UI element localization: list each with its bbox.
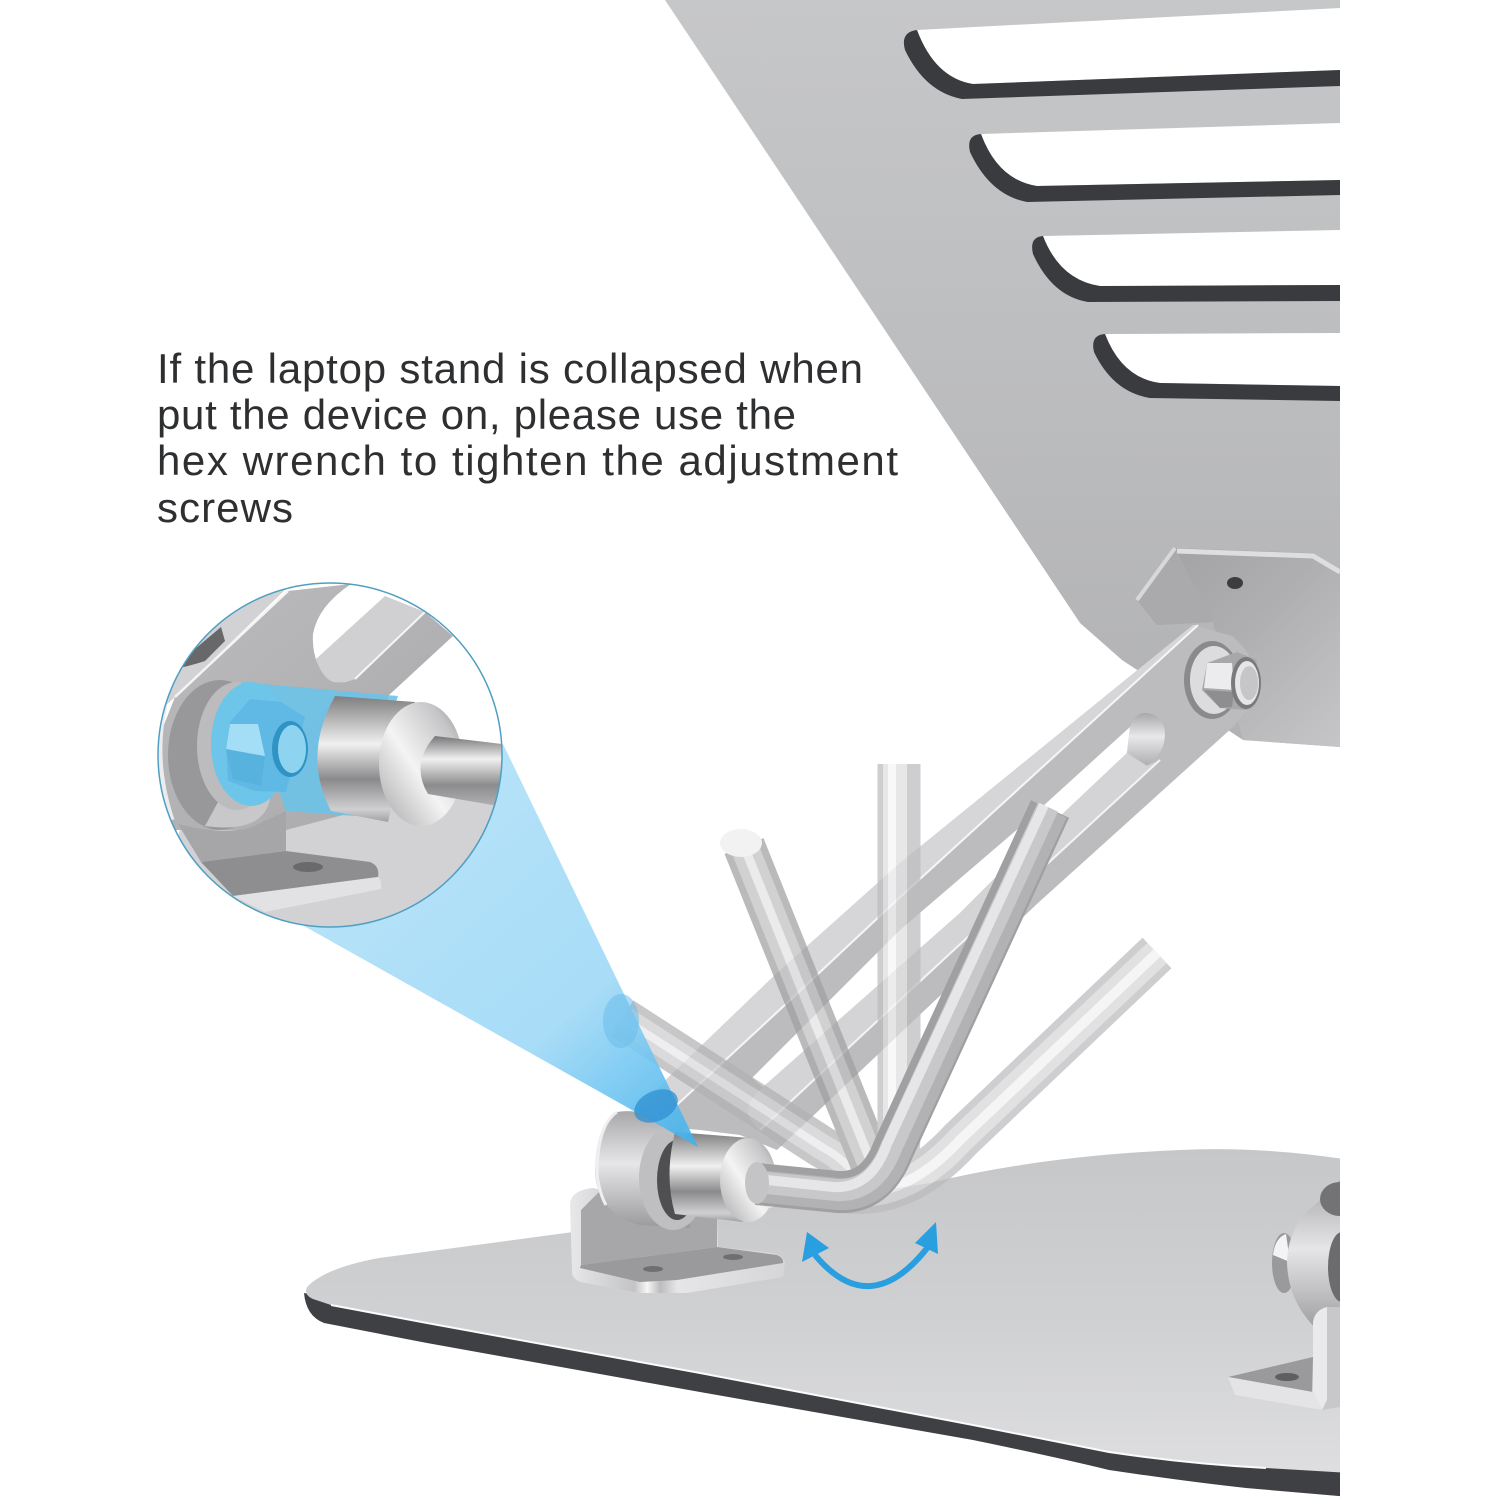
arm slot bbox=[752, 727, 1130, 1087]
lens: dark vent corner bbox=[183, 627, 225, 668]
lens: bracket vertical plate bbox=[178, 811, 286, 862]
wrench stem end bbox=[745, 1162, 769, 1204]
arm body bbox=[640, 625, 1257, 1150]
arm top strip bbox=[640, 625, 1198, 1127]
vent slot 3 bbox=[1032, 230, 1340, 302]
instruction text bbox=[157, 345, 898, 531]
support arm with long slot bbox=[640, 625, 1257, 1150]
lens: rail inside slot bbox=[316, 596, 425, 682]
lens: bracket disc bbox=[168, 680, 234, 830]
base plate bbox=[304, 1149, 1350, 1497]
ghost wrench: upper left bbox=[720, 829, 873, 1192]
top plate of the stand with vent slots bbox=[665, 0, 1340, 747]
right-hand bracket on base bbox=[1228, 1180, 1340, 1410]
instruction text: screws bbox=[157, 484, 293, 531]
instruction text: If the laptop stand is collapsed when bbox=[157, 345, 863, 392]
wrench socket bbox=[670, 1132, 776, 1222]
lens: upper left background bbox=[166, 590, 285, 705]
instruction text: put the device on, please use the bbox=[157, 391, 796, 438]
rotation arrow bbox=[802, 1222, 938, 1286]
left hinge bracket bbox=[570, 1188, 785, 1293]
ghost wrench positions bbox=[622, 764, 1157, 1193]
ghost wrench: left bbox=[622, 1018, 862, 1190]
lens: highlighted nut bbox=[211, 682, 398, 816]
lens: foot plate bbox=[201, 851, 378, 896]
lens: wrench stem bbox=[420, 736, 502, 806]
top bolt and nut bbox=[1184, 641, 1261, 719]
wrench long arm bbox=[757, 805, 1052, 1194]
magnified detail circle bbox=[150, 580, 510, 930]
lens: stand arm bbox=[150, 584, 453, 830]
lens: lower plate background bbox=[178, 798, 494, 926]
lens: arm slot bbox=[313, 584, 425, 682]
magnifier beam bbox=[304, 744, 698, 1147]
arm lower rail strip bbox=[765, 753, 1156, 1101]
vent slot 4 bbox=[1093, 333, 1340, 401]
vent slot 2 bbox=[969, 123, 1340, 202]
rear bracket on top plate bbox=[1137, 548, 1340, 747]
hinge disc bbox=[595, 1111, 696, 1230]
lens: socket bbox=[317, 696, 463, 826]
ghost wrench: right bbox=[845, 953, 1157, 1193]
vent slot 1 bbox=[904, 8, 1340, 99]
main wrench in socket bbox=[670, 805, 1052, 1222]
magnifier circle outline bbox=[158, 583, 502, 927]
ghost wrench: vertical bbox=[878, 764, 920, 1152]
beam overlay on ghost wrench tip bbox=[603, 994, 678, 1123]
instruction text: hex wrench to tighten the adjustment bbox=[157, 437, 898, 484]
